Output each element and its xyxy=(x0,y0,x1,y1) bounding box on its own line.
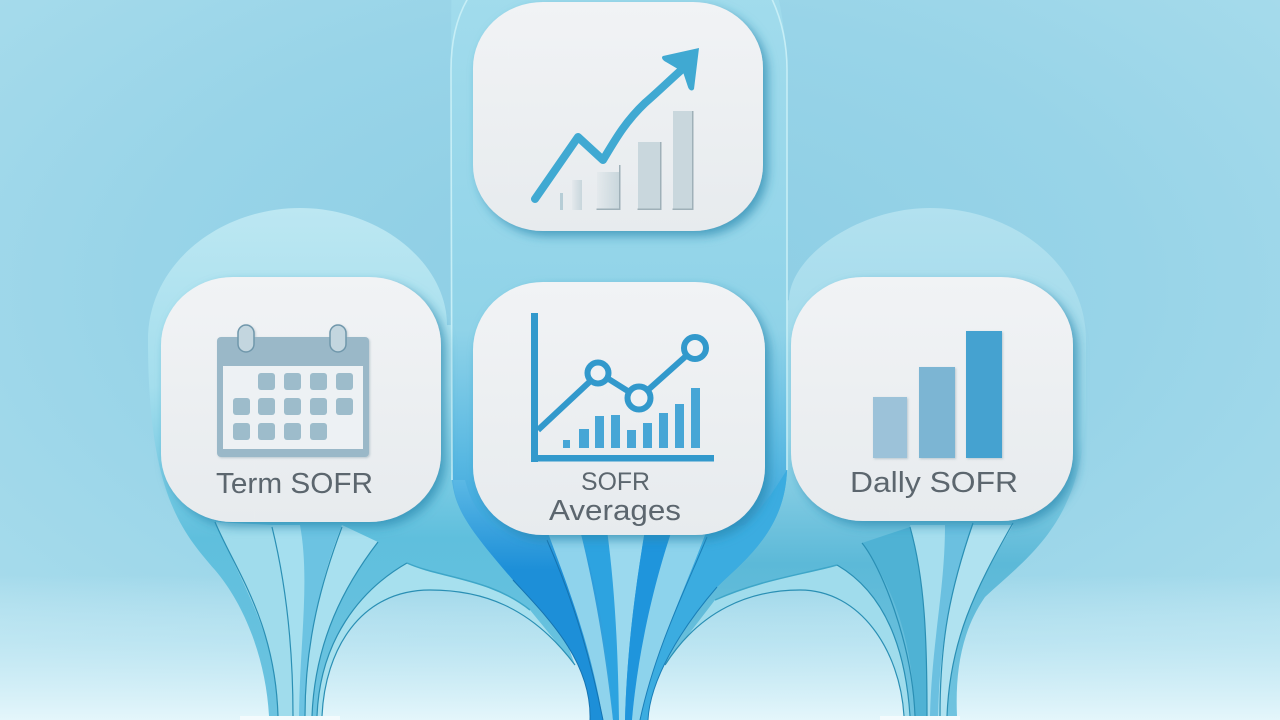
card: Term SOFR xyxy=(161,277,441,522)
icon: calendar xyxy=(217,325,369,457)
card: SOFR Averages xyxy=(473,282,765,535)
icon: three ascending bars xyxy=(873,331,1002,458)
center stream bands xyxy=(453,470,787,720)
icon: line and bar chart xyxy=(531,313,714,462)
center panel: SOFR Averages xyxy=(451,0,787,720)
center panel edge highlights xyxy=(451,0,787,480)
right balloon: Daily SOFR xyxy=(665,208,1086,716)
base pedestals xyxy=(240,716,960,720)
label: SOFR Averages xyxy=(549,468,681,527)
label: SOFR Averages: Averages xyxy=(549,495,681,527)
left balloon: Term SOFR xyxy=(148,208,575,716)
label: SOFR Averages: SOFR xyxy=(581,468,650,496)
card: rising trend xyxy=(473,2,763,231)
label: Term SOFR: Term SOFR xyxy=(216,468,373,500)
icon: bars and rising arrow xyxy=(535,48,699,210)
label: Daily SOFR: Dally SOFR xyxy=(850,467,1018,499)
card: Daily SOFR xyxy=(791,277,1073,521)
